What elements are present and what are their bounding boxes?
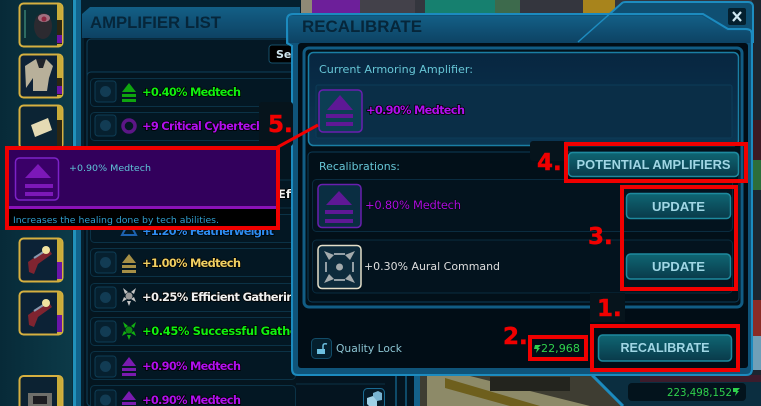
callout 1: recalibrate: 1. (597, 296, 622, 322)
list row: +9 Critical Cybertech: +9 Critical Cybertech (142, 119, 264, 133)
panel: recalibrate (287, 2, 753, 375)
list row: +0.90% Medtech (90, 352, 296, 380)
panel: amplifier list (73, 0, 322, 406)
list row: +9 Critical Cybertech (90, 112, 296, 140)
cost: 22,968: 22,968 (541, 343, 580, 355)
list row: +0.25% Efficient Gathering (90, 284, 302, 312)
icon: current amplifier (319, 90, 362, 132)
icon: blaster slot 2 (20, 292, 62, 334)
row: +0.80% medtech (312, 180, 732, 232)
list row: +0.40% Medtech: +0.40% Medtech (142, 85, 241, 99)
heading: recalibrate: RECALIBRATE (302, 17, 422, 36)
panel: current armoring amplifier (308, 52, 738, 146)
icon: data slot (20, 106, 62, 148)
credits display (628, 383, 746, 401)
button: recalibrate (598, 335, 732, 361)
tooltip description: Increases the healing done by tech abilities. (13, 216, 219, 226)
callout 2: cost: 2. (503, 324, 528, 350)
icon: relic slot (20, 376, 62, 406)
callout 3: update buttons: 3. (588, 224, 613, 250)
list row: hidden efficient: Effi (278, 187, 299, 201)
list row: +1.00% Medtech (90, 248, 296, 276)
panel: recalibrations (308, 152, 739, 302)
heading: amplifier list: AMPLIFIER LIST (90, 13, 222, 32)
list row: +0.40% Medtech (90, 78, 296, 106)
list row: +1.20% Featherweight (90, 214, 296, 242)
control: quality lock: Quality Lock (336, 343, 403, 355)
panel: amplifier list: Se (276, 48, 291, 61)
button: update 1: UPDATE (652, 199, 705, 214)
button: potential amplifiers: POTENTIAL AMPLIFIERS (576, 157, 731, 172)
label: current armoring amplifier: Current Armoring Amplifier: (319, 64, 473, 76)
button: recalibrate: RECALIBRATE (620, 340, 710, 355)
credits display: 223,498,152 (667, 387, 732, 399)
list row: +0.45% Successful Gathering (90, 318, 322, 346)
right list scroll frame (296, 375, 420, 406)
list row: +0.90% Medtech: +0.90% Medtech (142, 359, 241, 373)
list row: +0.45% Successful Gathering: +0.45% Successful Gathering (142, 324, 322, 338)
callout 4: potential amplifiers: 4. (537, 150, 562, 176)
tooltip name: +0.90% Medtech (69, 164, 151, 174)
list row: +0.25% Efficient Gathering: +0.25% Efficient Gathering (142, 290, 302, 304)
callout 2: cost (503, 324, 586, 359)
list row: +0.90% Medtech second (90, 386, 296, 406)
icon: dice button (364, 388, 384, 406)
button: close (728, 8, 746, 25)
text: +0.90% medtech: +0.90% Medtech (366, 103, 465, 117)
list row: hidden efficient (90, 180, 299, 208)
callout 5: link to current amplifier (259, 102, 318, 148)
icon: tooltip amplifier (16, 158, 58, 200)
left equipment icons column (20, 4, 62, 406)
icon: blaster slot (20, 238, 62, 282)
button: update 2: UPDATE (652, 259, 705, 274)
callout 1: recalibrate (590, 293, 738, 370)
row: +0.80% medtech: +0.80% Medtech (365, 198, 461, 212)
icon: helmet slot (20, 4, 62, 46)
tooltip: amplifier detail (7, 148, 278, 228)
button: update 1 (626, 194, 730, 218)
callout 5: link to current amplifier: 5. (268, 112, 293, 138)
label: recalibrations: Recalibrations: (319, 161, 400, 173)
icon: chest armor slot (20, 54, 62, 98)
button: potential amplifiers (568, 152, 738, 176)
callout 4: potential amplifiers (530, 141, 746, 181)
callout 3: update buttons (588, 187, 736, 289)
row: +0.30% aural command: +0.30% Aural Command (364, 260, 500, 273)
row: +0.30% aural command (312, 240, 732, 293)
list row: +1.20% Featherweight: +1.20% Featherweight (142, 224, 274, 238)
button: update 2 (626, 254, 730, 279)
control: quality lock (312, 338, 403, 358)
list row: +1.00% Medtech: +1.00% Medtech (142, 256, 241, 270)
